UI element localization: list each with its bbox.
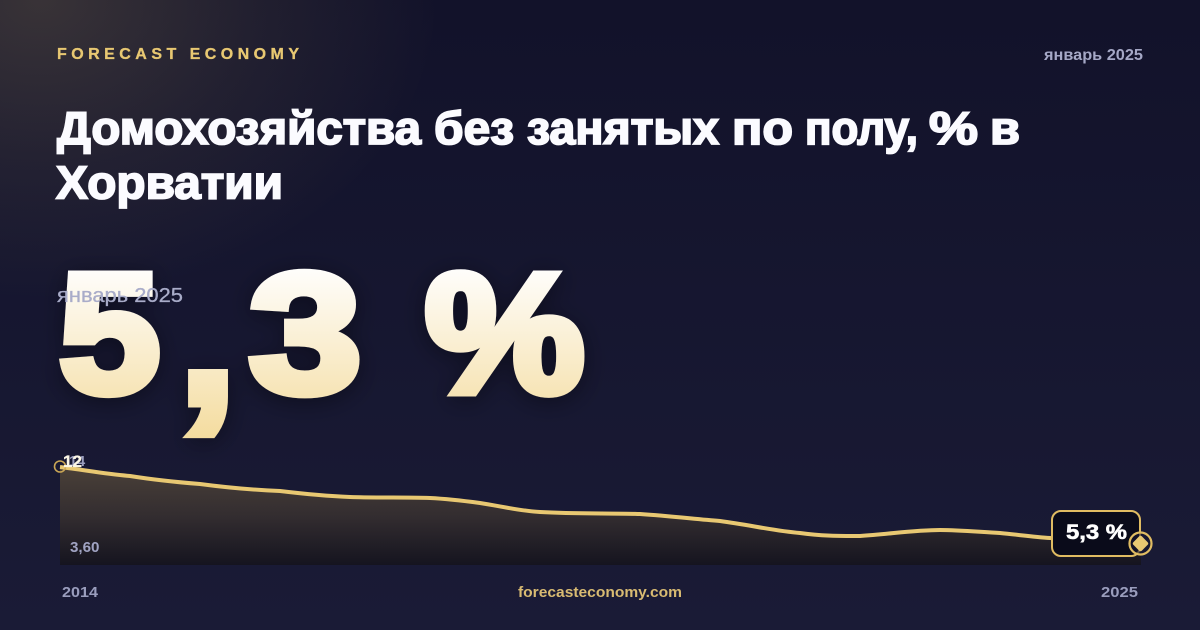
title: занятых <box>527 102 719 154</box>
start year: 2014 <box>62 585 98 601</box>
title: по <box>732 102 793 154</box>
min label: 3,60 <box>70 540 100 556</box>
title: полу, <box>805 102 918 154</box>
big value: , <box>178 223 237 445</box>
chart area <box>60 467 1141 565</box>
source: forecasteconomy.com <box>518 585 682 601</box>
end marker <box>1130 532 1152 554</box>
chart line <box>60 467 1140 543</box>
date subtitle over value: январь 2025 <box>57 285 183 307</box>
title <box>56 102 1020 208</box>
title: % <box>929 102 978 154</box>
value callout: 5,3 % <box>1066 520 1127 544</box>
line chart <box>54 453 1141 565</box>
big value: 5 <box>59 239 160 429</box>
start marker <box>54 461 66 472</box>
date top right: январь 2025 <box>1044 47 1143 64</box>
max label shadowed: 14 <box>69 454 85 470</box>
start value: 12 <box>63 453 82 471</box>
big value: % <box>425 239 584 429</box>
big value: 3 <box>249 238 361 428</box>
title: без <box>434 102 514 154</box>
title: Хорватии <box>56 156 283 208</box>
end year: 2025 <box>1101 585 1138 601</box>
big value <box>59 223 584 445</box>
value callout <box>1052 511 1140 556</box>
brand label: FORECAST ECONOMY <box>57 46 299 63</box>
title: Домохозяйства <box>57 102 421 154</box>
title: в <box>990 102 1020 154</box>
